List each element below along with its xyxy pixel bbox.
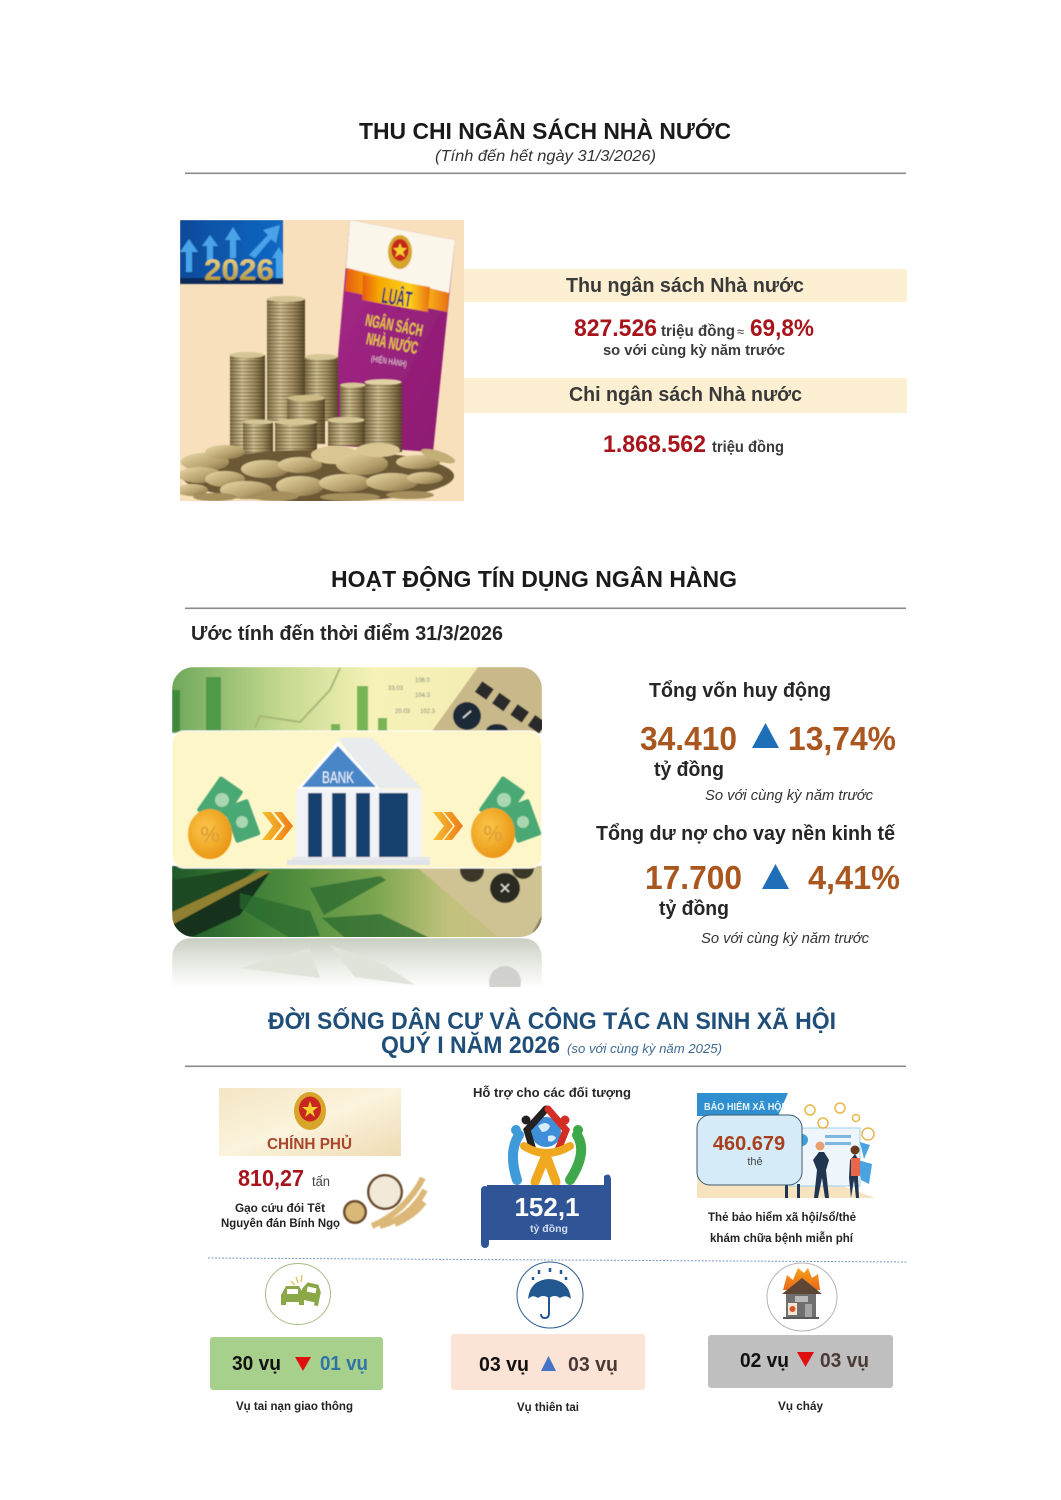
subheading: estimate date: Ước tính đến thời điểm 31/3/2026	[191, 623, 503, 645]
icon: rice bowls and wheat	[343, 1174, 425, 1226]
stat box: traffic accidents: 30 vụ	[232, 1353, 281, 1375]
illustration: bank with money flow: 106.0	[415, 678, 431, 684]
illustration: bank with money flow: 102.3	[420, 709, 436, 715]
icon: reflection	[172, 938, 542, 987]
caption: insurance cards: Thẻ bảo hiểm xã hội/sổ/thẻ	[708, 1210, 856, 1224]
illustration: insurance: BẢO HIỂM XÃ HỘI	[704, 1100, 784, 1113]
value: 34.410: 34.410	[640, 720, 737, 757]
stat box: natural disasters: 03 vụ	[479, 1354, 529, 1376]
note: So với cùng kỳ năm trước	[705, 787, 873, 804]
icon: bank building: BANK	[322, 768, 354, 787]
panel: rice relief	[219, 1088, 425, 1230]
arrow: out of bank	[433, 812, 463, 840]
heading: expenditure: Chi ngân sách Nhà nước	[569, 384, 802, 406]
image: government banner: CHÍNH PHỦ	[267, 1134, 352, 1153]
icon: left coin with banknotes	[188, 776, 261, 859]
value: expenditure	[603, 431, 784, 458]
note: compared with last year: so với cùng kỳ năm trước	[603, 343, 785, 359]
panel: support for beneficiaries	[473, 1085, 631, 1248]
icon: burning house	[767, 1263, 837, 1331]
value: rice tonnes: tấn	[312, 1174, 330, 1189]
heading: outstanding loans: Tổng dư nợ cho vay nền kinh tế	[596, 823, 896, 845]
caption: traffic accidents: Vụ tai nạn giao thông	[236, 1399, 353, 1413]
value: revenue: triệu đồng	[661, 323, 735, 340]
icon: car crash	[266, 1264, 330, 1324]
panel: traffic accidents	[210, 1264, 383, 1413]
illustration: coins and budget law book	[176, 220, 464, 502]
icon: budget law book: (HIỆN HÀNH)	[370, 353, 408, 369]
caption: rice relief: Gạo cứu đói Tết	[235, 1201, 325, 1215]
banner: amount: 152,1	[514, 1192, 580, 1222]
heading: revenue: Thu ngân sách Nhà nước	[566, 275, 804, 297]
panel: fires	[708, 1263, 893, 1413]
value: 17.700: 17.700	[645, 859, 742, 896]
icon: up triangle	[762, 864, 789, 889]
stat box: fires: 02 vụ	[740, 1350, 789, 1372]
section title: budget: THU CHI NGÂN SÁCH NHÀ NƯỚC	[359, 117, 731, 144]
illustration: bank with money flow: 33.03	[388, 686, 404, 692]
panel: state budget revenue	[464, 269, 907, 359]
icon: scattered coin pile	[176, 443, 457, 502]
stat box: traffic accidents: 01 vụ	[320, 1353, 368, 1375]
panel: state budget expenditure	[464, 378, 907, 458]
illustration: bank with money flow	[172, 667, 547, 998]
icon: left coin with banknotes: %	[200, 822, 220, 847]
illustration: insurance: 460.679	[713, 1133, 785, 1155]
caption: fires: Vụ cháy	[778, 1399, 823, 1413]
heading: mobilized capital: Tổng vốn huy động	[649, 680, 831, 702]
value: revenue	[574, 315, 814, 342]
icon: coin stacks	[230, 296, 402, 458]
stat box: fires: 03 vụ	[820, 1350, 869, 1372]
arrow: into bank	[262, 812, 293, 840]
section title: social welfare: (so với cùng kỳ năm 2025)	[567, 1041, 722, 1056]
section title: social welfare	[268, 1007, 836, 1059]
heading: support: Hỗ trợ cho các đối tượng	[473, 1085, 631, 1100]
icon: budget law book: NGÂN SÁCH	[364, 311, 424, 340]
value: revenue: ≈	[737, 324, 744, 339]
value: 13,74%: 13,74%	[788, 720, 896, 757]
illustration: insurance	[697, 1093, 875, 1198]
icon: people around globe	[511, 1109, 583, 1182]
caption: insurance cards: khám chữa bệnh miễn phí	[710, 1230, 854, 1245]
caption: insurance cards	[708, 1210, 856, 1245]
value: 4,41%: 4,41%	[808, 859, 900, 896]
icon: umbrella in rain	[517, 1262, 583, 1328]
icon: budget law book: LUẬT	[380, 283, 414, 312]
caption: rice relief	[221, 1201, 340, 1230]
illustration: bank with money flow: 20.03	[395, 709, 411, 715]
banner: amount	[481, 1175, 611, 1248]
subtitle: date: (Tính đến hết ngày 31/3/2026)	[435, 148, 656, 165]
value: revenue: 827.526	[574, 315, 657, 342]
note: So với cùng kỳ năm trước	[701, 930, 869, 947]
panel: social insurance cards	[697, 1093, 875, 1245]
stat box: traffic accidents	[210, 1337, 383, 1390]
icon: right coin with banknotes	[471, 776, 542, 858]
icon: budget law book	[330, 220, 455, 452]
image: government banner	[219, 1088, 401, 1156]
icon: budget law book: NHÀ NƯỚC	[365, 329, 419, 358]
unit: tỷ đồng	[654, 759, 724, 781]
section title: bank credit: HOẠT ĐỘNG TÍN DỤNG NGÂN HÀNG	[331, 565, 737, 592]
icon: up triangle	[752, 723, 779, 748]
illustration: bank with money flow: 104.3	[415, 693, 431, 699]
value: expenditure: triệu đồng	[712, 439, 784, 456]
badge: 2026 arrows	[180, 220, 283, 287]
unit: tỷ đồng	[659, 898, 729, 920]
stat box: natural disasters: 03 vụ	[568, 1354, 618, 1376]
section title: social welfare: QUÝ I NĂM 2026	[381, 1031, 560, 1059]
panel: total outstanding loans	[596, 823, 900, 947]
illustration: insurance: thẻ	[747, 1156, 763, 1168]
icon: right coin with banknotes: %	[483, 821, 503, 846]
badge: 2026 arrows: 2026	[204, 254, 274, 287]
stat box: fires	[708, 1335, 893, 1388]
value: expenditure: 1.868.562	[603, 431, 706, 458]
section title: social welfare: ĐỜI SỐNG DÂN CƯ VÀ CÔNG TÁC AN SINH XÃ HỘI	[268, 1007, 836, 1035]
panel: natural disasters	[451, 1262, 645, 1414]
stat box: natural disasters	[451, 1334, 645, 1390]
caption: rice relief: Nguyên đán Bính Ngọ	[221, 1216, 340, 1230]
caption: natural disasters: Vụ thiên tai	[517, 1400, 579, 1414]
value: revenue: 69,8%	[750, 315, 814, 342]
panel: total mobilized capital	[640, 680, 896, 804]
value: rice tonnes: 810,27	[238, 1165, 304, 1191]
icon: bank building	[287, 738, 430, 865]
banner: amount: tỷ đồng	[530, 1223, 568, 1235]
